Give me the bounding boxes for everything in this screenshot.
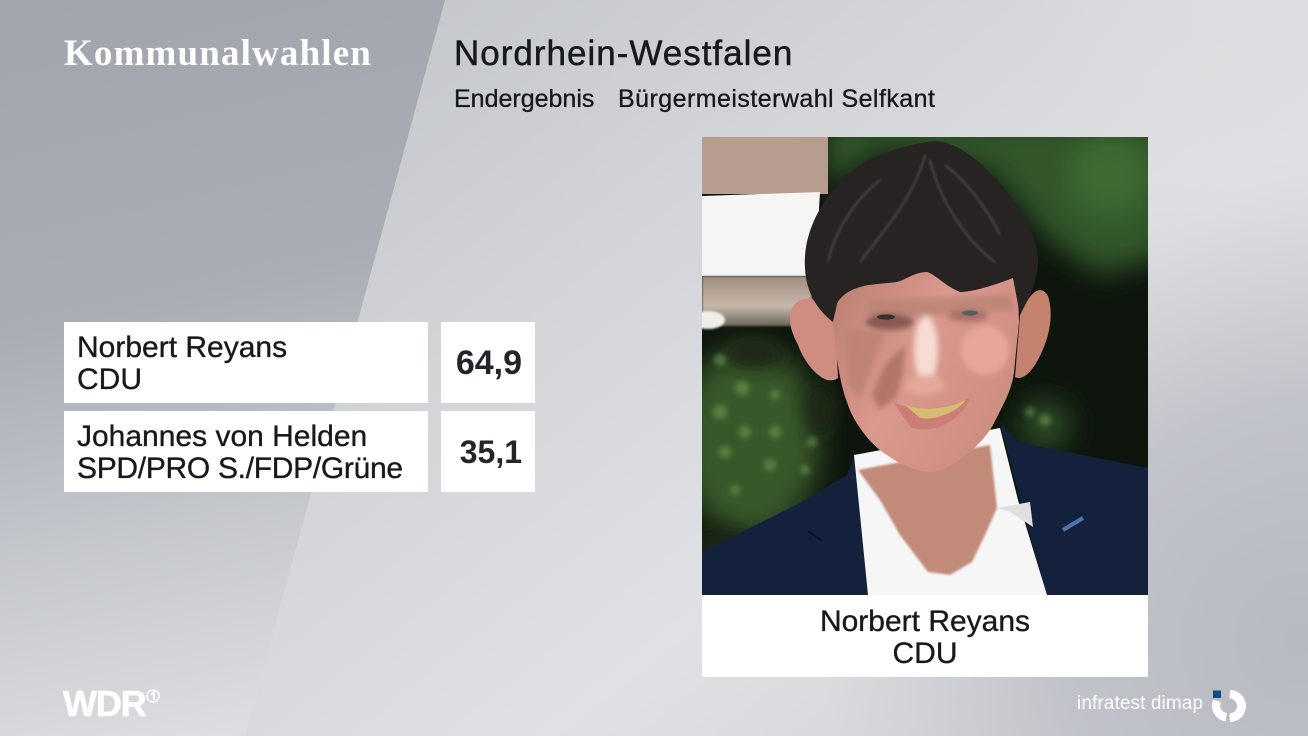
portrait caption: CDU (892, 637, 958, 670)
mouth (893, 398, 970, 429)
subheading: Endergebnis: Endergebnis (454, 85, 594, 113)
result row: Johannes von Helden name (64, 411, 428, 492)
heading: Kommunalwahlen: Kommunalwahlen (64, 33, 372, 74)
result row: Johannes von Helden name: SPD/PRO S./FDP/Grüne (77, 452, 403, 485)
hedge bokeh (713, 354, 1051, 495)
portrait photo (702, 137, 1148, 595)
portrait caption (702, 595, 1148, 677)
house roof (702, 137, 828, 194)
heading: Nordrhein-Westfalen: Nordrhein-Westfalen (454, 34, 793, 73)
result row: Johannes von Helden name: Johannes von Helden (77, 420, 367, 453)
hair (805, 141, 1038, 322)
backdrop: dark foliage (702, 137, 1148, 595)
subheading: Bürgermeisterwahl Selfkant: Bürgermeisterwahl Selfkant (618, 85, 935, 113)
result row: Johannes von Helden value: 35,1 (460, 434, 522, 470)
logo: WDR: WDR (63, 683, 146, 724)
ears (790, 299, 838, 380)
result row: Norbert Reyans value (441, 322, 535, 403)
hedge shadow patches (702, 344, 832, 552)
face shadows (845, 295, 1015, 410)
portrait caption: Norbert Reyans (820, 605, 1030, 638)
eyes (877, 314, 895, 320)
shirt (854, 428, 1047, 595)
result row: Johannes von Helden value (441, 411, 535, 492)
result row: Norbert Reyans name (64, 322, 428, 403)
logo: infratest dimap (1077, 690, 1246, 722)
logo: infratest dimap: infratest dimap (1077, 693, 1203, 714)
face (833, 272, 1019, 472)
white wall (702, 192, 820, 276)
result row: Norbert Reyans name: CDU (77, 363, 142, 396)
result row: Norbert Reyans value: 64,9 (456, 344, 522, 382)
suit (702, 455, 868, 595)
lapel detail (808, 531, 822, 541)
result row: Norbert Reyans name: Norbert Reyans (77, 331, 287, 364)
eaves (702, 276, 812, 326)
